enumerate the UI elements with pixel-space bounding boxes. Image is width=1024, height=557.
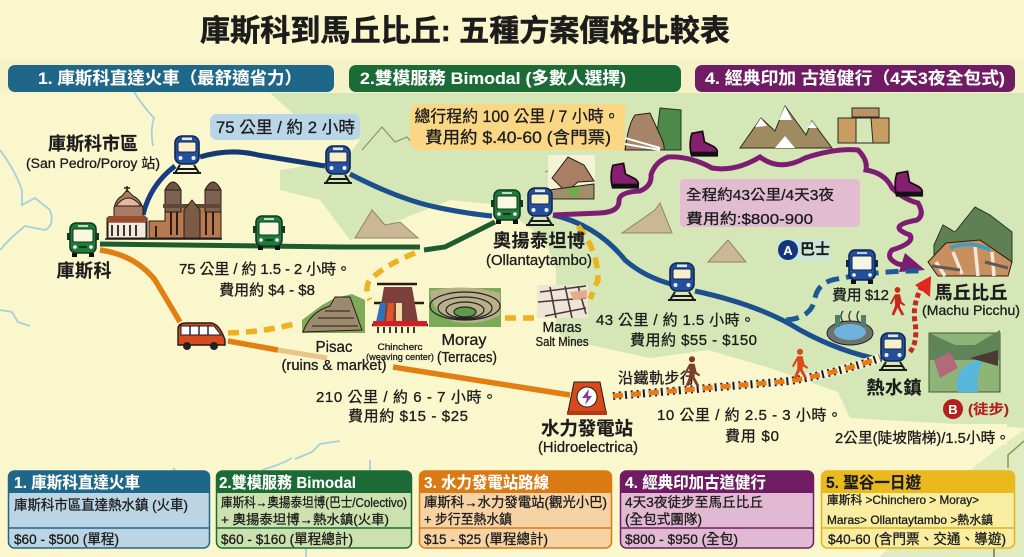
label: Chinchero bbox=[366, 342, 434, 363]
icon: train Aguas Calientes bbox=[879, 333, 907, 370]
route: steep stairs dotted bbox=[910, 286, 922, 352]
label: Ollantaytambo bbox=[486, 231, 592, 269]
card 2: bimodal: + 奧揚泰坦博→熱水鎮(火車) bbox=[221, 512, 389, 527]
icon: Pisac ruins bbox=[302, 294, 365, 333]
card 3: hydroelectric route: 庫斯科→水力發電站(觀光小巴) bbox=[424, 495, 607, 510]
label: bimodal total: 總行程約 100 公里 / 7 小時。 bbox=[414, 107, 620, 126]
label: B on foot bbox=[943, 399, 1009, 419]
route: green bus line bbox=[100, 222, 495, 250]
label: Machu Picchu: 馬丘比丘 bbox=[934, 283, 1008, 303]
label: bus option cost: 75 公里 / 約 1.5 - 2 小時。 bbox=[179, 261, 351, 278]
label: hydroelectric: 水力發電站 bbox=[541, 418, 633, 439]
label: A bus bbox=[778, 239, 830, 261]
icon: Moray terraces bbox=[429, 287, 501, 327]
label: rail walk cost bbox=[657, 407, 842, 445]
label: Pisac: Pisac bbox=[316, 339, 352, 356]
label: Maras: Salt Mines bbox=[536, 335, 588, 349]
route: walking along rails bbox=[613, 358, 880, 396]
label: train cost bbox=[596, 312, 757, 349]
label: stairs distance bbox=[835, 424, 1010, 447]
card 3: hydroelectric route: 3. 水力發電站路線 bbox=[424, 473, 549, 492]
label: rail walk cost: 費用 $0 bbox=[725, 428, 779, 445]
icon: Cusco cathedral bbox=[105, 182, 222, 239]
label: Pisac bbox=[282, 339, 387, 374]
rivers bbox=[0, 92, 370, 557]
label: Machu Picchu bbox=[922, 283, 1020, 318]
banner: route 2 bbox=[349, 65, 681, 92]
route: sacred valley dashed line bbox=[228, 226, 598, 333]
card 5: sacred valley bbox=[821, 471, 1015, 548]
card 5: sacred valley: $40-60 (含門票、交通、導遊) bbox=[828, 531, 1006, 547]
label: Moray: Moray bbox=[442, 332, 486, 349]
label: bimodal total: 費用約 $.40-60 (含門票) bbox=[425, 128, 611, 147]
arrow head: stairs bbox=[915, 276, 931, 297]
route: bus dashed to Machu Picchu bbox=[786, 271, 925, 320]
icon: Ollantaytambo ruin bbox=[548, 155, 595, 200]
icon: hiker to Machu Picchu bbox=[890, 287, 905, 315]
label: Ollantaytambo: (Ollantaytambo) bbox=[486, 253, 592, 269]
banner: route 4: 4. 經典印加 古道健行（4天3夜全包式) bbox=[705, 68, 1005, 88]
icon: bus Ollantaytambo bbox=[491, 190, 523, 224]
banner: route 2: 2.雙模服務 Bimodal (多數人選擇) bbox=[360, 68, 626, 88]
label: Ollantaytambo: 奧揚泰坦博 bbox=[493, 231, 585, 251]
card 3: hydroelectric route: + 步行至熱水鎮 bbox=[424, 512, 512, 527]
icon: orange van bbox=[178, 323, 225, 350]
label: Cusco city station: (San Pedro/Poroy 站) bbox=[26, 156, 160, 171]
card 3: hydroelectric route bbox=[419, 471, 612, 548]
icon: Chinchero loom bbox=[372, 284, 428, 333]
icon: stone gate bbox=[838, 108, 889, 143]
label: inca trail cost: 全程約43公里/4天3夜 bbox=[686, 187, 835, 204]
card 4: inca trail: 4. 經典印加古道健行 bbox=[625, 473, 766, 492]
card 2: bimodal bbox=[216, 471, 412, 548]
icon: ruins top bbox=[625, 108, 681, 150]
card 1: direct train: $60 - $500 (單程) bbox=[14, 531, 119, 547]
label: Chinchero: Chincherc bbox=[378, 342, 423, 353]
label: rail distance: 75 公里 / 約 2 小時 bbox=[216, 118, 355, 137]
card 4: inca trail: (全包式團隊) bbox=[625, 512, 702, 527]
title: 庫斯科到馬丘比丘: 五種方案價格比較表 bbox=[200, 15, 730, 48]
icon: train mid route bbox=[324, 146, 352, 183]
banner: route 1: 1. 庫斯科直達火車（最舒適省力） bbox=[38, 68, 302, 88]
label: bimodal total bbox=[410, 104, 630, 150]
icon: hiker on rails 1 bbox=[684, 356, 700, 386]
label: Maras bbox=[536, 319, 588, 349]
label: hydro option cost: 費用約 $15 - $25 bbox=[348, 408, 468, 425]
icon: train Ollantaytambo bbox=[526, 188, 554, 225]
icon: bus Cusco bbox=[67, 223, 99, 257]
label: hydroelectric bbox=[538, 418, 638, 456]
card 1: direct train bbox=[8, 471, 210, 548]
banner: route 1 bbox=[8, 65, 334, 92]
icon: train to Aguas Calientes bbox=[668, 263, 696, 300]
label: Moray: (Terraces) bbox=[437, 349, 497, 366]
card 3: hydroelectric route: $15 - $25 (單程總計) bbox=[424, 531, 548, 547]
icon: snowy mountains bbox=[740, 106, 832, 148]
label: A bus: 巴士 bbox=[800, 241, 830, 258]
card 2: bimodal: 2.雙模服務 Bimodal bbox=[219, 474, 356, 492]
card 4: inca trail: 4天3夜徒步至馬丘比丘 bbox=[625, 495, 763, 510]
card 5: sacred valley: 庫斯科 >Chinchero > Moray> bbox=[827, 493, 979, 507]
label: inca trail cost: 費用約:$800-900 bbox=[686, 211, 813, 228]
label: train cost: 43 公里 / 約 1.5 小時。 bbox=[596, 312, 755, 329]
label: hydro option cost bbox=[316, 389, 497, 425]
route: purple inca trail bbox=[553, 150, 921, 268]
route: blue train line bbox=[143, 152, 882, 360]
route: orange hydro line bbox=[100, 250, 570, 395]
card 5: sacred valley: Maras> Ollantaytambo >熱水鎮 bbox=[827, 512, 993, 527]
label: rail distance bbox=[210, 114, 360, 140]
icon: boot on trail 1 bbox=[611, 163, 639, 189]
label: train cost: 費用約 $55 - $150 bbox=[630, 332, 757, 349]
label: Cusco city station bbox=[26, 133, 160, 171]
label: hydroelectric: (Hidroelectrica) bbox=[538, 440, 638, 456]
label: walk along rails: 沿鐵軌步行 bbox=[618, 370, 695, 387]
card 2: bimodal: $60 - $160 (單程總計) bbox=[221, 531, 353, 547]
card 4: inca trail: $800 - $950 (全包) bbox=[625, 531, 738, 547]
banner: route 4 bbox=[695, 65, 1015, 92]
decorative mountains bbox=[355, 127, 746, 262]
label: bus fee: 費用 $12 bbox=[832, 287, 889, 304]
icon: boot on trail 3 bbox=[895, 171, 923, 197]
label: Chinchero: (weaving center) bbox=[366, 352, 434, 363]
icon: hiker on rails 2 bbox=[792, 349, 808, 379]
label: B on foot: B bbox=[948, 402, 958, 417]
label: Maras: Maras bbox=[542, 319, 582, 336]
icon: hot spring bbox=[827, 311, 873, 345]
card 4: inca trail bbox=[620, 471, 814, 548]
card 1: direct train: 1. 庫斯科直達火車 bbox=[14, 473, 140, 492]
label: Aguas Calientes: 熱水鎮 bbox=[866, 377, 922, 398]
card 2: bimodal: 庫斯科→奧揚泰坦博(巴士/Colectivo) bbox=[221, 495, 407, 510]
card 5: sacred valley: 5. 聖谷一日遊 bbox=[826, 473, 921, 492]
label: Cusco city station: 庫斯科市區 bbox=[48, 133, 138, 154]
label: Cusco: 庫斯科 bbox=[56, 260, 112, 281]
label: stairs distance: 2公里(陡坡階梯)/1.5小時。 bbox=[835, 430, 1010, 447]
label: B on foot: (徒步) bbox=[968, 401, 1009, 417]
label: A bus: A bbox=[783, 243, 793, 258]
icon: bus to Machu Picchu bbox=[846, 250, 878, 284]
label: Moray bbox=[437, 332, 497, 366]
label: inca trail cost bbox=[680, 179, 860, 228]
icon: Maras salt mines bbox=[537, 285, 588, 318]
label: rail walk cost: 10 公里 / 約 2.5 - 3 小時。 bbox=[657, 407, 842, 424]
icon: train Cusco bbox=[173, 136, 201, 173]
label: hydro option cost: 210 公里 / 約 6 - 7 小時。 bbox=[316, 389, 497, 406]
card 1: direct train: 庫斯科市區直達熱水鎮 (火車) bbox=[14, 497, 188, 513]
icon: hydroelectric bbox=[567, 382, 607, 415]
label: Machu Picchu: (Machu Picchu) bbox=[922, 302, 1020, 318]
icon: Machu Picchu bbox=[928, 207, 1012, 276]
icon: bus mid route bbox=[253, 216, 285, 250]
icon: boot on trail 2 bbox=[690, 131, 718, 157]
label: bus option cost: 費用約 $4 - $8 bbox=[219, 282, 315, 299]
icon: valley river bbox=[929, 330, 1000, 392]
arrow head: inca trail bbox=[899, 253, 925, 272]
label: Pisac: (ruins & market) bbox=[282, 357, 387, 374]
label: bus option cost bbox=[179, 261, 351, 299]
